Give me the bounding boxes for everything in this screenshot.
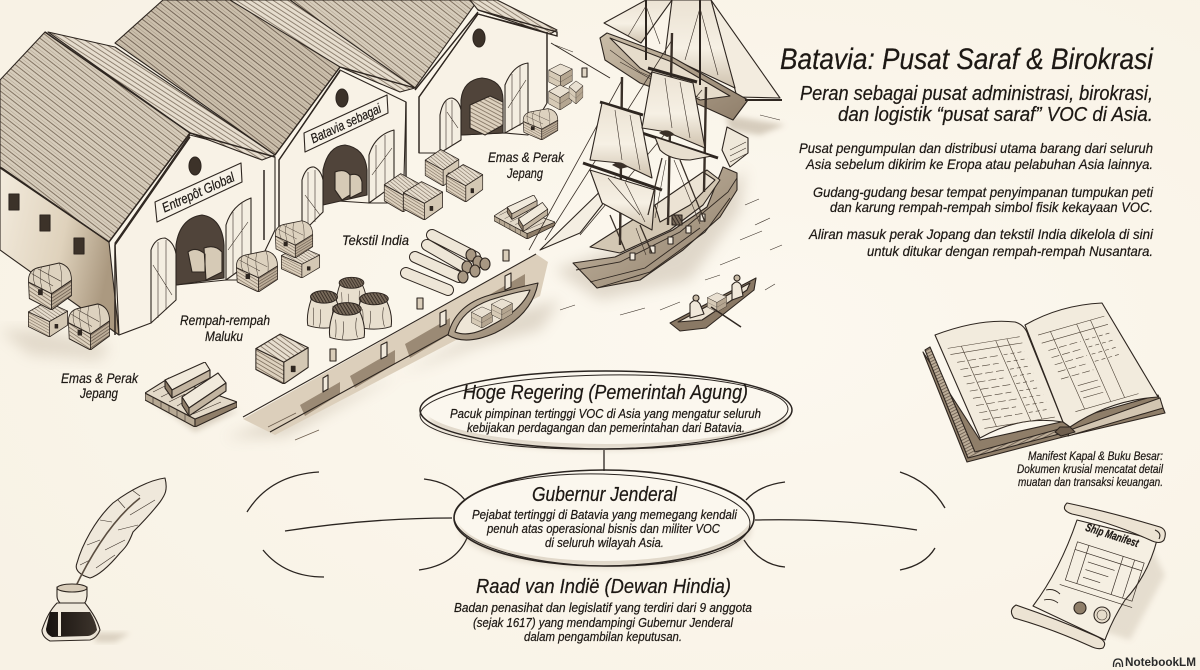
- water strokes: [555, 45, 782, 315]
- main ship sails: [590, 103, 652, 178]
- node: Raad van Indie: (sejak 1617) yang mendampingi Gubernur Jenderal: [473, 616, 734, 630]
- goods: small barrels: [330, 250, 509, 361]
- text block: warehouses: dan karung rempah-rempah simbol fisik kekayaan VOC.: [830, 199, 1153, 215]
- main ship jib sail: [540, 177, 615, 250]
- label: Rempah-rempah Maluku: Maluku: [205, 328, 243, 344]
- label: Emas & Perak Jepang lower: [61, 370, 139, 401]
- back ship: [600, 0, 782, 167]
- node: Hoge Regering: kebijakan perdagangan dan pemerintahan dari Batavia.: [467, 421, 745, 435]
- text block: warehouses: Gudang-gudang besar tempat penyimpanan tumpukan peti: [813, 184, 1154, 200]
- caption: ledger: Manifest Kapal & Buku Besar:: [1028, 449, 1163, 463]
- ledger left page table: [948, 337, 1055, 429]
- ledger right page table: [1038, 316, 1139, 413]
- text block: warehouses: [813, 184, 1154, 215]
- text block: silver and textiles: Aliran masuk perak Jopang dan tekstil India dikelola di sini: [808, 226, 1154, 242]
- goods: back silver ingots: [494, 195, 555, 239]
- pier back edge: [551, 43, 610, 78]
- caption: ledger: [1017, 449, 1163, 489]
- connector lines: [247, 450, 945, 577]
- goods: front silver ingots: [145, 362, 237, 427]
- text block: distribution: Pusat pengumpulan dan distribusi utama barang dari seluruh: [799, 140, 1153, 156]
- text block: silver and textiles: [808, 226, 1154, 259]
- panel: dock and warehouses illustration: [0, 0, 785, 440]
- label: Rempah-rempah Maluku: [180, 312, 270, 344]
- label: Emas & Perak Jepang upper: Jepang: [506, 165, 543, 181]
- label: Emas & Perak Jepang lower: Jepang: [79, 385, 118, 401]
- caption: ledger: Dokumen krusial mencatat detail: [1017, 462, 1163, 476]
- warehouse 2: [115, 0, 415, 233]
- panel: governance diagram: [247, 371, 945, 644]
- label: Rempah-rempah Maluku: Rempah-rempah: [180, 312, 270, 328]
- node: Gubernur Jenderal: di seluruh wilayah Asia.: [545, 536, 664, 550]
- label: Emas & Perak Jepang lower: Emas & Perak: [61, 370, 139, 386]
- node: Gubernur Jenderal: [453, 470, 754, 570]
- warehouse 1: [0, 32, 275, 335]
- node: Hoge Regering: Pacuk pimpinan tertinggi VOC di Asia yang mengatur seluruh: [450, 407, 761, 421]
- title: Batavia: Pusat Saraf & Birokrasi: [780, 43, 1154, 76]
- sign: Batavia sebagai: Batavia sebagai: [308, 101, 384, 146]
- subtitle: dan logistik “pusat saraf” VOC di Asia.: [838, 104, 1153, 126]
- goods: spice sacks: [307, 277, 392, 340]
- node: Raad van Indie: Raad van Indië (Dewan Hindia): [476, 576, 731, 598]
- icon: ship manifest scroll: Ship Manifest: [1084, 522, 1141, 550]
- node: Gubernur Jenderal: penuh atas operasional bisnis dan militer VOC: [486, 522, 721, 536]
- label: Emas & Perak Jepang upper: Emas & Perak: [488, 149, 565, 165]
- main ship masts: [620, 33, 706, 245]
- node: Raad van Indie: [454, 576, 752, 644]
- goods: crates at third warehouse: [523, 64, 583, 140]
- label: Tekstil India: Tekstil India: [342, 232, 409, 248]
- subtitle: [800, 83, 1153, 126]
- node: Raad van Indie: Badan penasihat dan legislatif yang terdiri dari 9 anggota: [454, 601, 752, 615]
- warehouse 3: [272, 0, 557, 153]
- brand: NotebookLM: NotebookLM: [1125, 657, 1196, 669]
- goods: chests by first warehouse: [28, 263, 110, 350]
- icon: quill and inkwell: [42, 478, 166, 642]
- main ship rigging: [610, 158, 705, 253]
- quay pilings: [243, 254, 548, 440]
- caption: ledger: muatan dan transaksi keuangan.: [1018, 475, 1163, 489]
- small pier house: [722, 127, 748, 167]
- sign: Entrepot Global: Entrepôt Global: [160, 169, 238, 215]
- node: Gubernur Jenderal: Gubernur Jenderal: [532, 484, 677, 506]
- loaded boat at quay: [448, 283, 538, 340]
- node: Raad van Indie: dalam pengambilan keputusan.: [524, 630, 682, 644]
- main ship: [529, 33, 737, 288]
- node: Gubernur Jenderal: Pejabat tertinggi di Batavia yang memegang kendali: [472, 508, 738, 522]
- icon: open ledger book: [923, 303, 1165, 462]
- goods: chest on quay: [256, 334, 308, 384]
- text block: distribution: [799, 140, 1153, 172]
- quay shadow and water wash: [0, 115, 785, 438]
- text block: silver and textiles: untuk ditukar dengan rempah-rempah Nusantara.: [867, 243, 1153, 259]
- node: Hoge Regering: Hoge Regering (Pemerintah Agung): [463, 382, 748, 404]
- goods: rolled textiles: [406, 235, 490, 290]
- label: Emas & Perak Jepang upper: [488, 149, 565, 181]
- rowboat with two figures: [670, 275, 756, 331]
- icon: ship manifest scroll: [1011, 503, 1165, 649]
- goods: crates at second warehouse: [384, 150, 483, 220]
- text block: distribution: Asia sebelum dikirim ke Eropa atau pelabuhan Asia lainnya.: [805, 156, 1153, 172]
- goods: chests at first door: [236, 221, 320, 292]
- subtitle: Peran sebagai pusat administrasi, birokrasi,: [800, 83, 1153, 105]
- node: Hoge Regering: [419, 371, 792, 452]
